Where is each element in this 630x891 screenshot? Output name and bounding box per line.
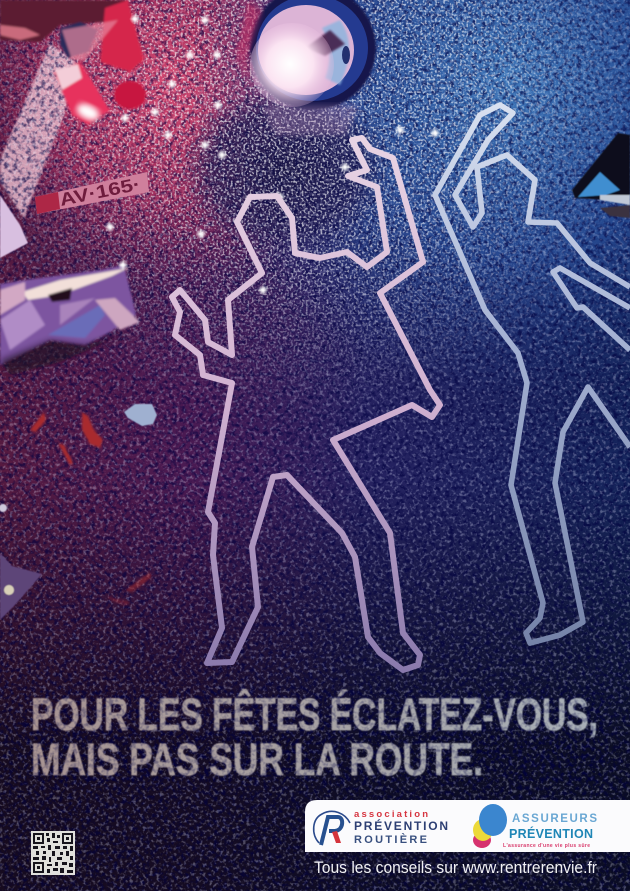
headline wear texture: [25, 690, 605, 782]
headline: MAIS PAS SUR LA ROUTE.: [31, 734, 483, 785]
logo panel: [305, 800, 630, 852]
logo: assureurs prévention: PRÉVENTION: [509, 826, 593, 841]
chalk outline: right figure: [435, 105, 630, 643]
licence plate: AV·165·: [58, 174, 142, 210]
debris, right: [572, 133, 630, 218]
logo: association prévention routière: PRÉVENTION: [354, 818, 448, 833]
licence plate: [35, 172, 149, 214]
wheel: [236, 0, 376, 135]
sparkles: [104, 13, 441, 296]
logo: association prévention routière: [314, 809, 448, 846]
logo: association prévention routière: association: [354, 809, 428, 820]
logo: association prévention routière: ROUTIÈRE: [354, 833, 427, 846]
crumpled metal, upper left edge: [0, 195, 28, 258]
grey stone: [124, 404, 157, 426]
logo: assureurs prévention: L'assurance d'une vie plus sûre: [503, 843, 590, 849]
crumpled metal, left: [0, 265, 140, 375]
logo: assureurs prévention: ASSUREURS: [512, 813, 597, 825]
headline: [31, 689, 598, 785]
red shards: [30, 412, 152, 606]
debris, lower left edge: [0, 504, 42, 620]
logo: assureurs prévention: [473, 804, 597, 849]
crashed car debris, top left: [0, 0, 146, 125]
website line: Tous les conseils sur www.rentrerenvie.fr: [314, 858, 597, 877]
chalk outline: left figure: [172, 138, 440, 670]
QR code: [31, 831, 75, 875]
